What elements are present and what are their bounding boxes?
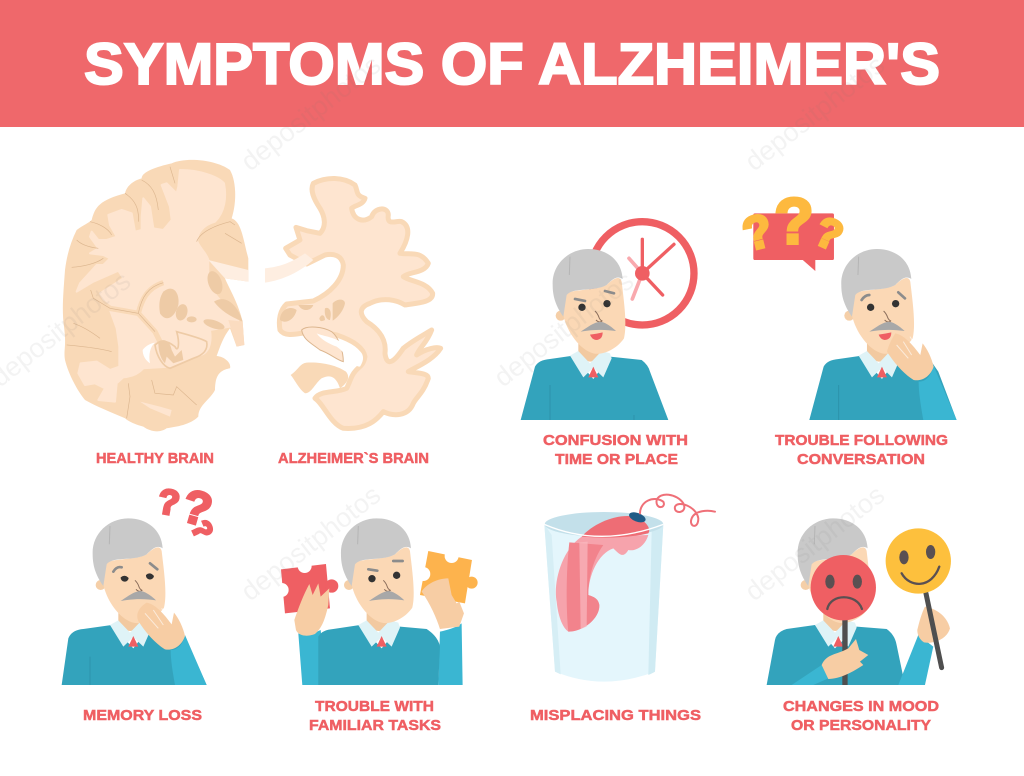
label: mood: OR PERSONALITY [791, 717, 931, 734]
icon: happy face on stick [886, 528, 951, 668]
panel: memory loss [62, 479, 219, 685]
label: conversation [775, 432, 948, 468]
label: confusion: CONFUSION WITH [543, 432, 688, 449]
icon: question marks: ? [155, 482, 183, 524]
icon: speech bubble with question marks [737, 185, 850, 271]
panel: confusion with time or place [521, 222, 694, 420]
watermark: depositphotos [488, 266, 639, 393]
icon: speech bubble with question marks: ? [774, 185, 814, 258]
healthy brain [63, 160, 248, 431]
label: healthy brain: HEALTHY BRAIN [96, 450, 214, 467]
man [521, 249, 668, 420]
label: confusion [543, 432, 688, 468]
icon: question marks: ? [185, 516, 219, 543]
watermark: depositphotos [739, 50, 890, 177]
label: memory loss: MEMORY LOSS [83, 707, 202, 724]
man [62, 518, 207, 685]
watermark: depositphotos [235, 50, 386, 177]
icon: sad face on stick [811, 555, 876, 685]
panel: misplacing things [544, 495, 715, 682]
label: familiar tasks: TROUBLE WITH [315, 698, 434, 715]
label: conversation: TROUBLE FOLLOWING [775, 432, 948, 449]
label: familiar tasks [309, 698, 441, 734]
man [767, 518, 933, 685]
label: misplacing things: MISPLACING THINGS [530, 707, 701, 724]
label: mood [783, 698, 939, 734]
watermark [0, 50, 890, 607]
panel: trouble following conversation [737, 185, 957, 420]
icon: question marks: ? [176, 479, 218, 537]
label: familiar tasks: FAMILIAR TASKS [309, 717, 441, 734]
icon: speech bubble with question marks: ? [737, 203, 778, 261]
title: SYMPTOMS OF ALZHEIMER'S [84, 32, 940, 97]
label: conversation: CONVERSATION [797, 451, 925, 468]
icon: question marks [155, 479, 219, 543]
icon: glass [544, 512, 663, 682]
man [294, 518, 464, 685]
hand at chest [822, 639, 868, 679]
title banner [0, 0, 1024, 127]
watermark: depositphotos [739, 480, 890, 607]
hand holding stick [917, 607, 950, 643]
label: confusion: TIME OR PLACE [555, 451, 678, 468]
icon: speech bubble with question marks: ? [808, 207, 850, 260]
label: mood: CHANGES IN MOOD [783, 698, 939, 715]
label: alzheimer's brain: ALZHEIMER`S BRAIN [278, 450, 429, 467]
alzheimer's brain [265, 179, 441, 428]
man [809, 249, 957, 420]
icon: red puzzle piece [275, 559, 338, 613]
watermark: depositphotos [235, 480, 386, 607]
panel: trouble with familiar tasks [275, 518, 478, 685]
icon: telephone receiver [544, 495, 715, 632]
icon: orange puzzle piece [416, 549, 478, 603]
panel: changes in mood or personality [767, 518, 951, 685]
icon: clock [591, 222, 694, 325]
